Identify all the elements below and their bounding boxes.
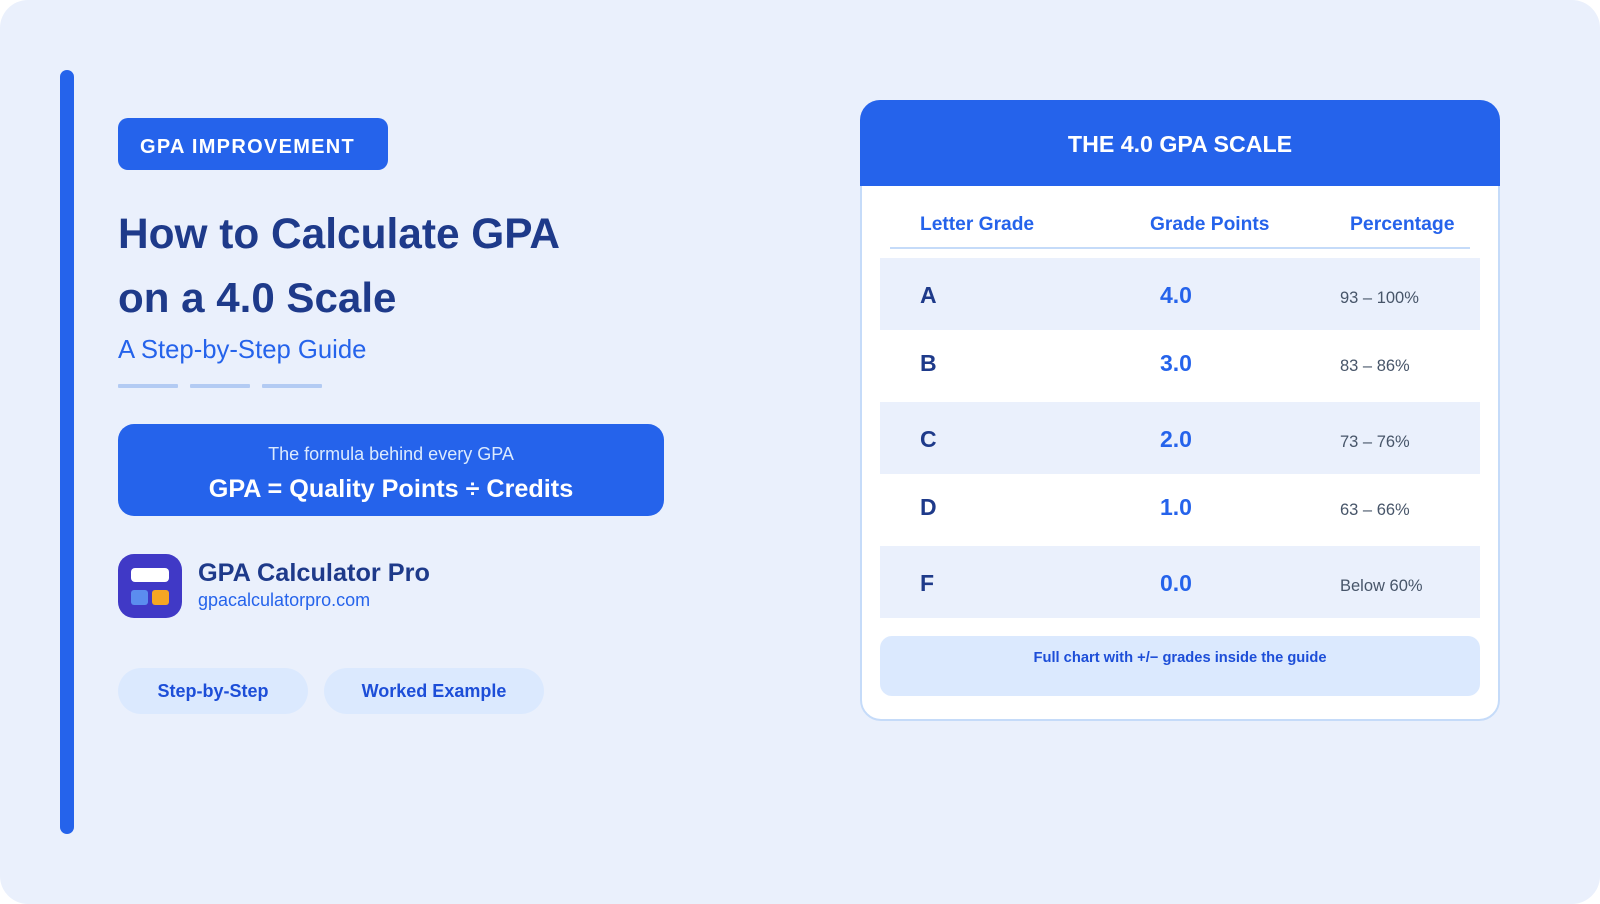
pill: worked example [324,668,544,714]
icon: calculator logo [118,554,182,618]
row: F: F [920,570,934,596]
formula box: GPA = Quality Points ÷ Credits [209,475,573,503]
brand URL: gpacalculatorpro.com [198,590,370,610]
row: A: 93 – 100% [1340,289,1419,307]
row: B: 83 – 86% [1340,357,1410,375]
formula box [118,424,664,516]
subtitle: A Step-by-Step Guide [118,336,366,364]
column headings: Percentage [1350,213,1455,235]
footer note [880,636,1480,696]
pill: step-by-step: Step-by-Step [157,681,269,701]
card header: THE 4.0 GPA SCALE [1068,131,1292,157]
pill: worked example: Worked Example [362,681,506,701]
badge: GPA improvement: GPA IMPROVEMENT [140,136,355,158]
card header [860,100,1500,186]
badge: GPA improvement [118,118,388,170]
formula box: The formula behind every GPA [268,444,514,464]
row: F: 0.0 [1160,570,1192,596]
row: C: C [920,426,937,452]
column headings: Grade Points [1150,214,1269,235]
heading rule [890,247,1470,249]
row: A [880,258,1480,330]
row: C: 73 – 76% [1340,433,1410,451]
panel: GPA scale card [860,100,1500,720]
row: F [880,546,1480,618]
row: A: A [920,282,937,308]
row: C [880,402,1480,474]
row: D: D [920,494,937,520]
row: B [880,330,1480,402]
row: D [880,474,1480,546]
row: D: 63 – 66% [1340,501,1410,519]
row: F: Below 60% [1340,577,1423,595]
row: D: 1.0 [1160,494,1192,520]
row: A: 4.0 [1160,282,1192,308]
title: on a 4.0 Scale [118,274,396,321]
row: B: B [920,350,937,376]
title [118,210,560,321]
brand [118,554,430,618]
footer note: Full chart with +/− grades inside the guide [1034,650,1326,666]
dashes [118,384,322,388]
pill: step-by-step [118,668,308,714]
row: C: 2.0 [1160,426,1192,452]
column headings [920,213,1455,235]
title: How to Calculate GPA [118,210,560,257]
brand name: GPA Calculator Pro [198,559,430,587]
column headings: Letter Grade [920,214,1034,235]
row: B: 3.0 [1160,350,1192,376]
accent bar [60,70,74,834]
